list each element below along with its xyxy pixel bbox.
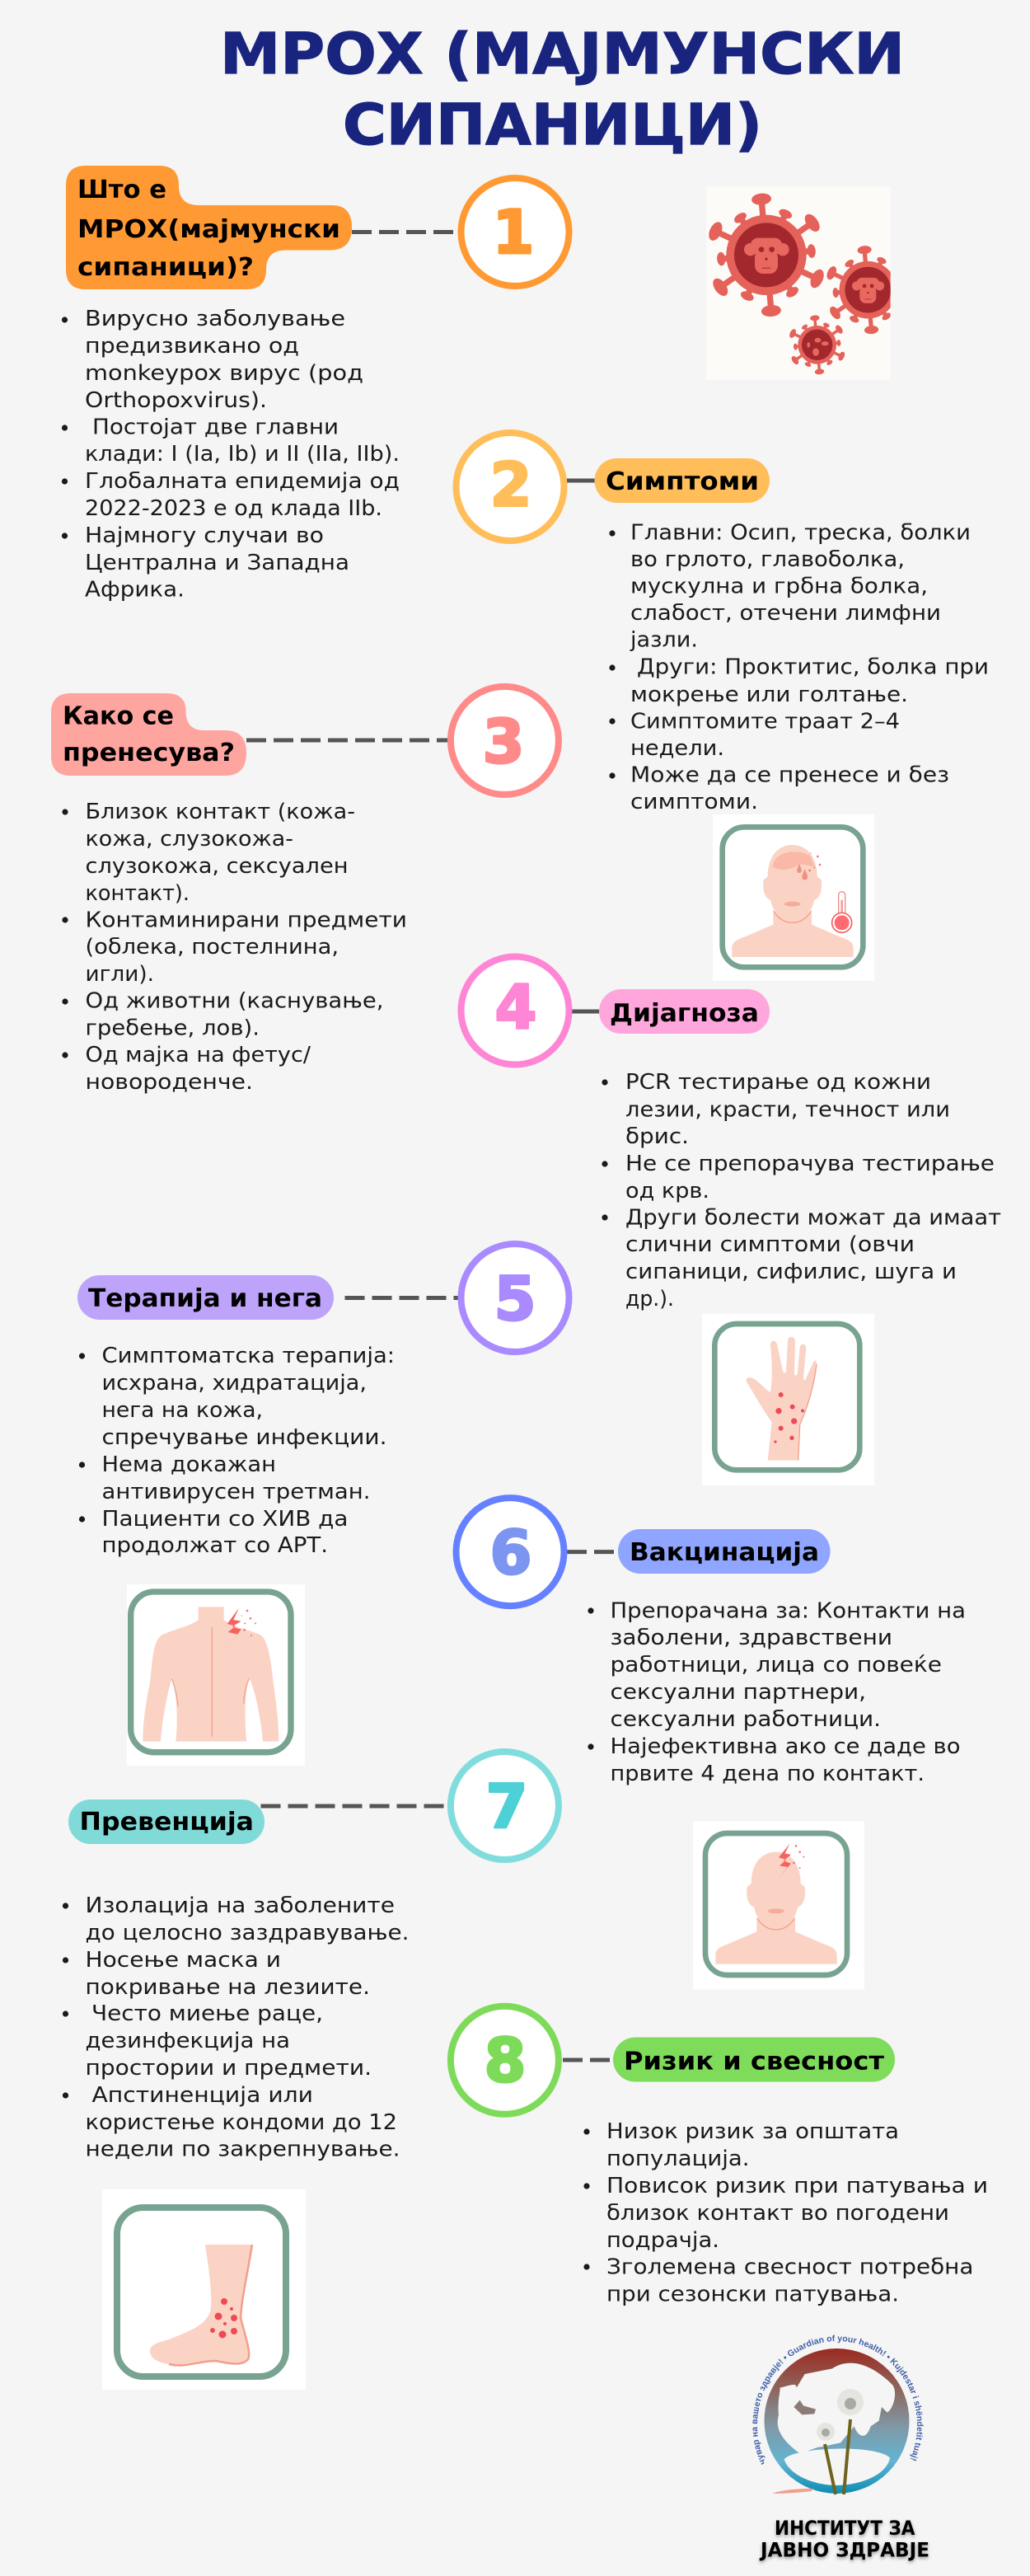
logo ring text: чувар на вашето здравје! • Guardian of your health! • Kujdestar i shëndetit tuaj! (753, 2334, 924, 2465)
heading badge: prevention (68, 1799, 265, 1844)
step 7: prevention (63, 1752, 559, 2390)
title: СИПАНИЦИ) (343, 92, 762, 158)
number circle 7: 7 (486, 1772, 527, 1842)
text block: vaccination: првите 4 дена по контакт. (610, 1762, 925, 1786)
text block: therapy and care: Пациенти со ХИВ да (102, 1507, 348, 1532)
text block: therapy and care: продолжат со АРТ. (102, 1533, 328, 1558)
text block: vaccination: Препорачана за: Контакти на (610, 1599, 966, 1624)
number circle 2: 2 (490, 450, 531, 521)
text block: symptoms: недели. (630, 736, 724, 761)
number circle 7 (451, 1752, 559, 1860)
number circle 6 (456, 1498, 564, 1606)
text block: prevention (63, 1893, 410, 2161)
heading badge: risk and awareness: Ризик и свесност (624, 2048, 885, 2076)
text block: what is mpox (62, 307, 400, 602)
text block: risk and awareness: Повисок ризик при патувања и (606, 2174, 988, 2198)
text block: what is mpox: 2022-2023 е од клада IIb. (85, 496, 382, 521)
image: head with fever (713, 814, 874, 981)
text block: prevention: Често миење раце, (91, 2001, 323, 2026)
text block: transmission: слузокожа, сексуален (86, 854, 348, 879)
heading badge: diagnosis (599, 989, 770, 1034)
text block: prevention: дезинфекција на (86, 2029, 290, 2053)
text block: what is mpox: Orthopoxvirus). (85, 388, 267, 413)
number circle 4: 4 (495, 973, 536, 1043)
number circle 6: 6 (490, 1518, 531, 1588)
image: head pain (693, 1821, 864, 1990)
text block: prevention: Носење маска и (86, 1948, 281, 1973)
heading badge: transmission: Како се (63, 702, 174, 730)
number circle 2 (456, 433, 564, 541)
logo globe (765, 2348, 910, 2494)
text block: what is mpox: Централна и Западна (85, 551, 349, 575)
text block: symptoms: јазли. (630, 628, 698, 653)
text block: therapy and care: спречување инфекции. (102, 1425, 387, 1450)
text block: transmission: Од животни (каснување, (86, 989, 384, 1014)
logo caption: ИНСТИТУТ ЗА (775, 2517, 915, 2540)
logo: institute of public health (753, 2334, 929, 2564)
text block: what is mpox: Најмногу случаи во (85, 523, 324, 548)
text block: symptoms: Може да се пренесе и без (630, 763, 949, 788)
text block: vaccination: сексуални партнери, (610, 1680, 866, 1705)
image: back pain (127, 1584, 305, 1766)
text block: symptoms: во грлото, главоболка, (630, 547, 905, 572)
heading badge: symptoms (595, 458, 770, 503)
text block: diagnosis: брис. (625, 1124, 689, 1149)
text block: risk and awareness: при сезонски патувања. (606, 2282, 899, 2306)
text block: what is mpox: Вирусно заболување (85, 307, 345, 331)
text block: symptoms: Други: Проктитис, болка при (637, 655, 989, 679)
text block: therapy and care: антивирусен третман. (102, 1480, 371, 1504)
heading badge: symptoms: Симптоми (606, 467, 759, 496)
step 1: what is mpox (62, 166, 911, 602)
text block: diagnosis (602, 1070, 1001, 1311)
text block: what is mpox: Африка. (85, 577, 185, 602)
heading badge: what is mpox: сипаници)? (77, 253, 254, 282)
text block: symptoms: мускулна и грбна болка, (630, 574, 928, 598)
text block: therapy and care: Симптоматска терапија: (102, 1344, 395, 1368)
text block: vaccination (588, 1599, 966, 1786)
number circle 8 (451, 2006, 559, 2114)
text block: what is mpox: клади: I (Ia, Ib) и II (IIa, IIb). (85, 442, 400, 467)
heading badge: therapy and care: Терапија и нега (88, 1284, 322, 1313)
title (220, 21, 905, 158)
text block: symptoms: слабост, отечени лимфни (630, 601, 941, 626)
text block: diagnosis: PCR тестирање од кожни (625, 1070, 931, 1095)
text block: what is mpox: Глобалната епидемија од (85, 469, 400, 494)
heading badge: what is mpox: МРОХ(мајмунски (77, 215, 340, 244)
text block: what is mpox: Постојат две главни (92, 415, 339, 440)
heading badge: vaccination: Вакцинација (630, 1538, 819, 1567)
text block: symptoms: симптоми. (630, 790, 758, 814)
number circle 5 (461, 1244, 569, 1352)
text block: transmission: игли). (86, 962, 154, 987)
text block: risk and awareness: близок контакт во погодени (606, 2201, 949, 2226)
text block: transmission: Од мајка на фетус/ (86, 1043, 311, 1067)
text block: therapy and care: исхрана, хидратација, (102, 1371, 367, 1396)
text block: therapy and care: Нема докажан (102, 1452, 276, 1477)
text block: transmission: Контаминирани предмети (86, 908, 407, 933)
step 8: risk and awareness (451, 2006, 988, 2306)
text block: diagnosis: од крв. (625, 1179, 709, 1204)
text block: risk and awareness: популација. (606, 2147, 750, 2171)
step 5: therapy and care (77, 1244, 569, 1766)
text block: therapy and care: нега на кожа, (102, 1398, 263, 1423)
text block: risk and awareness: подрачја. (606, 2228, 719, 2253)
text block: risk and awareness: Зголемена свесност потребна (606, 2255, 974, 2280)
logo caption (759, 2517, 929, 2562)
text block: vaccination: Најефективна ако се даде во (610, 1734, 961, 1759)
text block: risk and awareness: Низок ризик за општата (606, 2119, 899, 2144)
text block: diagnosis: др.). (625, 1287, 674, 1311)
heading badge: what is mpox (66, 166, 352, 289)
text block: what is mpox: monkeypox вирус (род (85, 361, 363, 386)
step 6: vaccination (456, 1498, 966, 1990)
heading badge: what is mpox: Што е (77, 176, 166, 204)
title: МРОХ (МАЈМУНСКИ (220, 21, 905, 87)
number circle 5: 5 (494, 1265, 536, 1335)
text block: transmission (62, 800, 407, 1095)
heading badge: risk and awareness (613, 2038, 895, 2082)
text block: transmission: кожа, слузокожа- (86, 827, 293, 852)
image: hand with rash (702, 1314, 874, 1485)
heading badge: vaccination (618, 1529, 831, 1574)
text block: prevention: недели по закрепнување. (86, 2137, 400, 2161)
image: foot with rash (102, 2189, 306, 2390)
text block: transmission: гребење, лов). (86, 1016, 260, 1040)
text block: vaccination: работници, лица со повеќе (610, 1653, 942, 1677)
text block: therapy and care (79, 1344, 395, 1558)
text block: prevention: простории и предмети. (86, 2056, 372, 2081)
number circle 3 (451, 687, 559, 795)
text block: transmission: контакт). (86, 881, 190, 906)
heading badge: therapy and care (77, 1275, 334, 1320)
text block: diagnosis: Не се препорачува тестирање (625, 1152, 995, 1176)
text block: diagnosis: лезии, красти, течност или (625, 1098, 950, 1123)
text block: transmission: Близок контакт (кожа- (86, 800, 355, 824)
text block: prevention: користење кондоми до 12 (86, 2110, 397, 2135)
heading badge: diagnosis: Дијагноза (610, 999, 759, 1028)
text block: symptoms (609, 521, 989, 814)
step 3: transmission (51, 687, 559, 1095)
number circle 1: 1 (493, 198, 534, 268)
step 4: diagnosis (461, 956, 1001, 1485)
text block: diagnosis: Други болести можат да имаат (625, 1205, 1001, 1230)
number circle 8: 8 (485, 2026, 526, 2096)
logo caption: ЈАВНО ЗДРАВЈЕ (759, 2539, 929, 2562)
text block: risk and awareness (583, 2119, 988, 2306)
text block: what is mpox: предизвикано од (85, 334, 299, 359)
text block: symptoms: Главни: Осип, треска, болки (630, 521, 971, 546)
heading badge: transmission (51, 693, 246, 776)
text block: prevention: покривање на лезиите. (86, 1975, 370, 2000)
text block: prevention: до целосно заздравување. (86, 1921, 409, 1945)
heading badge: transmission: пренесува? (63, 739, 235, 767)
image: monkeypox viruses (709, 193, 891, 374)
heading badge: prevention: Превенција (79, 1808, 254, 1837)
text block: prevention: Апстиненција или (92, 2083, 313, 2108)
text block: diagnosis: сипаници, сифилис, шуга и (625, 1260, 957, 1284)
number circle 4 (461, 956, 569, 1065)
step 2: symptoms (456, 433, 989, 981)
text block: transmission: новороденче. (86, 1070, 253, 1095)
text block: prevention: Изолација на заболените (86, 1893, 395, 1918)
text block: symptoms: мокрење или голтање. (630, 683, 908, 707)
text block: transmission: (облека, постелнина, (86, 935, 339, 960)
number circle 1 (461, 178, 569, 286)
text block: vaccination: заболени, здравствени (610, 1626, 892, 1650)
text block: diagnosis: слични симптоми (овчи (625, 1232, 915, 1257)
text block: symptoms: Симптомите траат 2–4 (630, 709, 900, 734)
number circle 3: 3 (483, 707, 524, 777)
text block: vaccination: сексуални работници. (610, 1707, 881, 1732)
